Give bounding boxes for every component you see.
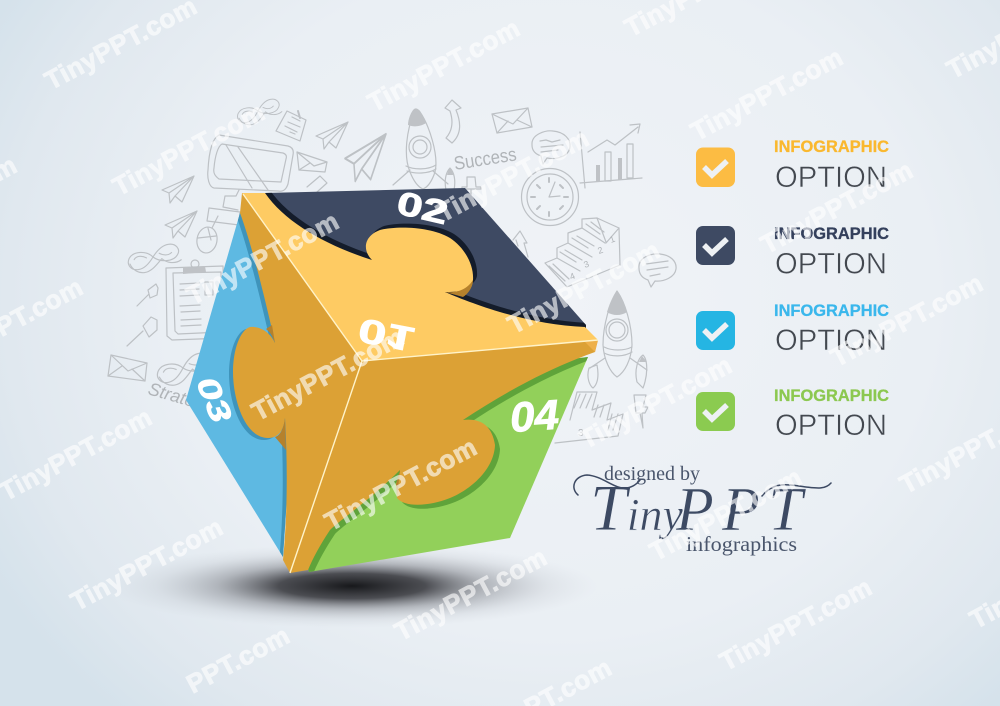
option 1: OPTION — [775, 161, 887, 194]
left orange face — [233, 193, 362, 573]
doodle: curved arrow — [445, 100, 461, 143]
doodle: envelope top right — [492, 108, 532, 133]
watermarks: TinyPPT.com — [645, 461, 807, 567]
number 01: 01 — [355, 310, 418, 358]
doodle: pin right — [634, 395, 648, 428]
doodle: arrow up — [513, 231, 528, 257]
doodle: rocket right — [590, 291, 647, 377]
doodle: speech bubble top — [532, 131, 570, 164]
doodle: paper plane left top — [162, 176, 194, 203]
watermarks: TinyPPT.com — [686, 41, 848, 147]
doodle: clock — [522, 168, 578, 226]
watermarks: TinyPPT.com — [320, 431, 482, 537]
doodle: clipboard — [166, 260, 225, 340]
watermarks: TinyPPT.com — [66, 511, 228, 617]
doodle: paper plane left lower — [165, 211, 197, 238]
logo: designed by TinyPPT infographics: Tiny — [590, 472, 683, 545]
option 2: INFOGRAPHIC — [774, 224, 889, 243]
doodle: infinity left — [127, 243, 182, 275]
doodle: stairs: 2 — [596, 245, 604, 256]
logo: designed by TinyPPT infographics — [574, 463, 831, 556]
doodle: strategy label: Strategy — [146, 379, 217, 417]
doodle: small rocket top — [445, 168, 455, 190]
panel 03: blue face — [186, 213, 287, 557]
logo: designed by TinyPPT infographics: PPT — [675, 476, 807, 544]
cube — [186, 184, 603, 577]
option 4: OPTION — [775, 409, 887, 442]
panel 02: navy face — [265, 188, 586, 328]
option 1: INFOGRAPHIC — [774, 137, 889, 156]
doodle: pin large — [127, 317, 157, 346]
panel 01: orange cube corner — [233, 193, 598, 573]
front orange face — [290, 340, 598, 573]
doodle sketches behind the cube — [108, 98, 676, 443]
panel 04: green face — [308, 357, 588, 572]
doodle: infinity top — [235, 98, 283, 127]
doodle: small rockets right — [588, 355, 647, 388]
doodle: pin top — [462, 177, 481, 199]
doodle: mouse — [195, 216, 219, 255]
tip of right edge — [585, 340, 598, 352]
option 2: OPTION — [775, 248, 887, 280]
option 3: OPTION — [775, 324, 887, 357]
logo: designed by TinyPPT infographics: designed by — [604, 463, 700, 485]
doodle: note — [276, 111, 306, 141]
doodle: envelope left — [108, 355, 147, 381]
watermarks: PPT.com — [181, 620, 295, 699]
watermarks: TinyPPT.com — [247, 321, 409, 427]
highlight edges — [243, 194, 598, 573]
doodle: paper plane large — [345, 134, 386, 181]
watermarks: TinyPPT.com — [715, 571, 877, 677]
doodle: cup — [307, 176, 327, 192]
doodle: stairs right: 3 — [578, 428, 584, 439]
doodle: stairs — [545, 218, 620, 287]
watermarks: TinyPPT.com — [575, 349, 737, 455]
doodle: rocket top — [393, 108, 448, 189]
doodle: bar chart with arrow — [580, 124, 642, 188]
doodle: envelope small — [297, 152, 327, 172]
watermarks: TinyPPT.com — [503, 234, 665, 340]
doodle: paper plane small — [316, 122, 348, 149]
watermarks: TinyPPT.com — [432, 122, 594, 228]
doodle: monitor — [207, 135, 293, 225]
top yellow face — [242, 193, 598, 361]
logo: designed by TinyPPT infographics: infographics — [686, 532, 797, 556]
watermarks: TinyPPT.com — [108, 96, 270, 202]
doodle: stairs: 3 — [582, 259, 590, 270]
doodle: stairs right — [555, 392, 623, 443]
doodle: pin small — [137, 284, 158, 306]
ground shadow — [107, 544, 597, 628]
number 02: 02 — [393, 184, 452, 232]
doodle: success label: Success — [452, 144, 518, 175]
legend options — [696, 137, 889, 442]
watermarks: TinyPPT.com — [390, 541, 552, 647]
knob shadows — [266, 280, 473, 498]
number 03: 03 — [190, 372, 239, 427]
doodle: stairs: 4 — [568, 271, 576, 282]
watermarks: TinyPPT.com — [182, 205, 344, 311]
option 3: INFOGRAPHIC — [774, 301, 889, 320]
doodle: stairs: 1 — [608, 234, 616, 245]
watermarks: TinyPPT.com — [826, 267, 988, 373]
option 1 — [696, 137, 889, 194]
doodle: speech bubble right — [639, 254, 676, 287]
option 2 — [696, 224, 889, 280]
doodle: infinity lower — [155, 351, 214, 388]
watermarks: TinyPPT.com — [756, 154, 918, 260]
number 04: 04 — [508, 392, 561, 442]
option 3 — [696, 301, 889, 357]
watermarks: TinyPPT.com — [363, 12, 525, 118]
option 4 — [696, 386, 889, 442]
option 4: INFOGRAPHIC — [774, 386, 889, 405]
